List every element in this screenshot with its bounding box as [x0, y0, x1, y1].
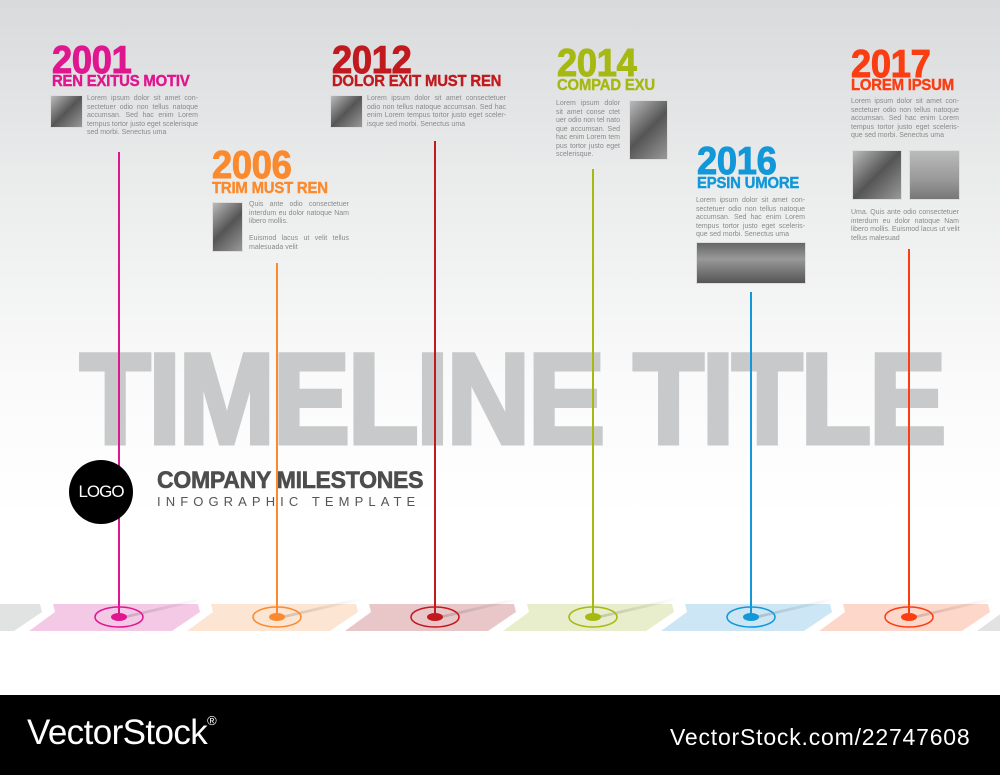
milestone 2017: que sed morbi. Senectus uma — [851, 132, 944, 139]
milestone 2017: Uma. Quis ante odio consectetuer — [851, 209, 959, 216]
milestone 2012: enim Lorem tempus tortor justo eget sceler- — [367, 112, 506, 119]
milestone 2012: DOLOR EXIT MUST REN — [332, 73, 501, 90]
milestone 2014 — [556, 42, 668, 160]
milestone 2012: isque sed morbi. Senectus uma — [367, 120, 465, 128]
milestone 2014: hac enim Lorem tem — [556, 134, 620, 141]
milestone 2017 — [851, 43, 960, 242]
milestone 2016: Lorem ipsum dolor sit amet con- — [696, 197, 805, 204]
milestone 2016: accumsan. Sed hac enim Lorem — [696, 214, 805, 221]
footer bar — [0, 695, 1000, 775]
milestone 2001: REN EXITUS MOTIV — [52, 73, 190, 90]
milestone 2006: TRIM MUST REN — [212, 180, 328, 197]
title: TIMELINE TITLE — [80, 328, 944, 471]
milestone 2006: interdum eu dolor natoque Nam — [249, 210, 349, 216]
milestone 2001: sectetuer odio non tellus natoque — [87, 104, 198, 110]
milestone 2006: malesuada velit — [249, 244, 298, 250]
milestone 2017: tempus tortor justo eget sceleris- — [851, 124, 959, 130]
milestone 2017: tellus malesuad — [851, 234, 900, 242]
milestone 2017: 2017 — [851, 43, 931, 86]
milestone 2016: que sed morbi. Senectus uma — [696, 231, 789, 238]
company heading: COMPANY MILESTONES — [157, 467, 423, 494]
logo — [69, 460, 133, 524]
footer bar: VectorStock.com/22747608 — [670, 724, 970, 750]
milestone 2014: scelerisque. — [556, 151, 593, 158]
milestone 2014: pus tortor justo eget — [556, 142, 620, 150]
milestone 2006 — [212, 144, 349, 252]
milestone 2016: 2016 — [697, 140, 777, 183]
milestone 2017: LOREM IPSUM — [851, 77, 954, 94]
milestone 2012: odio non tellus natoque accumsan. Sed hac — [367, 104, 506, 110]
milestone 2014: COMPAD EXU — [557, 77, 655, 94]
milestone 2006: libero mollis. — [249, 218, 288, 225]
milestone 2016: EPSIN UMORE — [697, 175, 799, 192]
milestone 2014: 2014 — [557, 42, 637, 85]
milestone 2014: uer odio non tel nato — [556, 117, 620, 124]
company heading — [157, 467, 423, 509]
company heading: INFOGRAPHIC TEMPLATE — [157, 494, 420, 509]
milestone 2006: Quis ante odio consectetuer — [249, 201, 349, 208]
milestone 2012: Lorem ipsum dolor sit amet consectetuer — [367, 95, 506, 102]
milestone 2001: accumsan. Sed hac enim Lorem — [87, 112, 198, 119]
milestone 2001 — [50, 39, 198, 136]
milestone 2017: interdum eu dolor natoque Nam — [851, 218, 959, 224]
milestone 2001: sed morbi. Senectus uma — [87, 129, 166, 136]
milestone 2012 — [330, 39, 506, 128]
milestone 2006: Euismod lacus ut velit tellus — [249, 235, 349, 242]
logo: LOGO — [78, 482, 124, 501]
milestone 2014: sit amet conse ctet — [556, 108, 620, 116]
milestone 2014: Lorem ipsum dolor — [556, 100, 620, 107]
milestone 2001: Lorem ipsum dolor sit amet con- — [87, 95, 198, 102]
milestone 2006: 2006 — [212, 144, 292, 187]
footer bar: VectorStock® — [27, 713, 216, 752]
milestone 2016: tempus tortor justo eget sceleris- — [696, 222, 805, 230]
milestone 2017: libero mollis. Euismod lacus ut velit — [851, 226, 960, 233]
milestone 2014: que accumsan. Sed — [556, 126, 620, 132]
milestone 2017: accumsan. Sed hac enim Lorem — [851, 115, 959, 122]
milestone 2001: tempus tortor justo eget scelerisque — [87, 120, 198, 128]
milestone 2017: Lorem ipsum dolor sit amet con- — [851, 98, 959, 105]
milestone 2017: sectetuer odio non tellus natoque — [851, 106, 959, 114]
milestone 2012: 2012 — [332, 39, 412, 82]
ribbon — [0, 601, 1000, 631]
milestone 2001: 2001 — [52, 39, 132, 82]
milestone 2016: sectetuer odio non tellus natoque — [696, 206, 805, 212]
milestone 2016 — [696, 140, 806, 284]
